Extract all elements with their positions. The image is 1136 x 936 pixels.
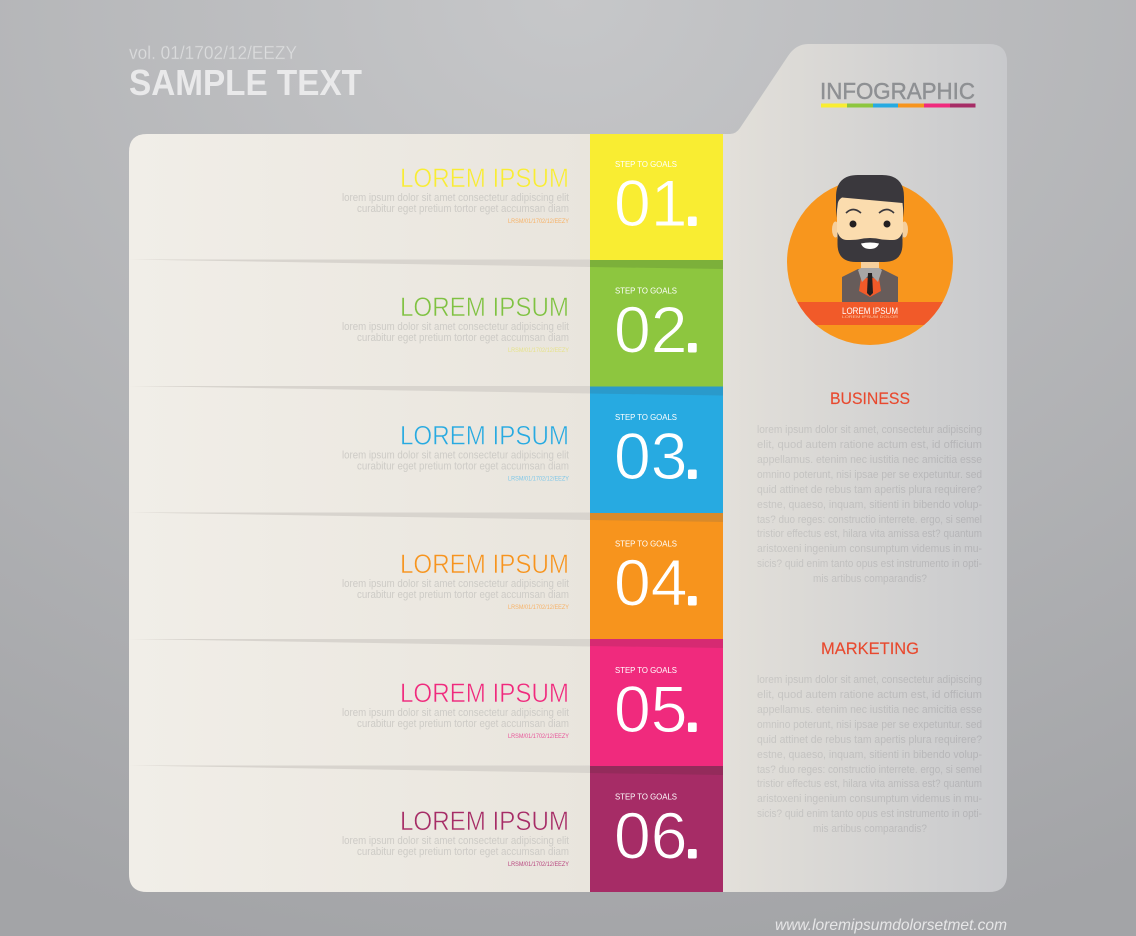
text block: marketing: quid attinet de rebus tam apertis plura requirere? — [757, 734, 982, 746]
step 6 — [342, 766, 723, 892]
step 1: lorem ipsum dolor sit amet consectetur adipiscing elit — [342, 192, 569, 204]
step 3: lorem ipsum dolor sit amet consectetur adipiscing elit — [342, 450, 569, 462]
step 1: LRSM/01/1702/12/EEZY — [508, 219, 569, 225]
step 4: curabitur eget pretium tortor eget accumsan diam — [357, 589, 569, 601]
step 4: . — [684, 550, 701, 617]
step 1 — [342, 134, 723, 260]
step 5: LRSM/01/1702/12/EEZY — [508, 734, 569, 740]
avatar banner — [797, 302, 943, 325]
step 1: . — [684, 170, 701, 238]
step 6: . — [684, 803, 701, 870]
text block: marketing: mis artibus comparandis? — [813, 823, 927, 835]
step 6: LOREM IPSUM — [400, 806, 569, 836]
step 4 — [342, 513, 723, 639]
text block: marketing: appellamus. etenim nec iustitia nec amicitia esse — [757, 704, 982, 716]
step 4: STEP TO GOALS — [615, 538, 677, 548]
step 3: . — [684, 424, 701, 490]
step 5: curabitur eget pretium tortor eget accumsan diam — [357, 718, 569, 730]
text block: marketing: sicis? quid enim tanto opus est instrumento in opti- — [757, 808, 982, 820]
avatar head — [832, 175, 908, 262]
issue line: vol. 01/1702/12/EEZY — [129, 43, 297, 63]
text block: business: mis artibus comparandis? — [813, 573, 927, 585]
step 2: lorem ipsum dolor sit amet consectetur adipiscing elit — [342, 321, 569, 333]
text block: business: tristior effectus est, hilara vita amissa est? quantum — [757, 528, 982, 540]
step 2 — [342, 260, 723, 386]
step 3: LRSM/01/1702/12/EEZY — [508, 476, 569, 482]
step 2: 02 — [614, 292, 687, 366]
step 3: curabitur eget pretium tortor eget accumsan diam — [357, 460, 569, 472]
infographic heading with colour bar: INFOGRAPHIC — [820, 78, 975, 104]
step 4: 04 — [614, 546, 687, 620]
text block: marketing: omnino poterunt, nisi ipsae per se expetuntur. sed — [757, 719, 982, 731]
text block: marketing: tristior effectus est, hilara vita amissa est? quantum — [757, 778, 982, 790]
text block: marketing: lorem ipsum dolor sit amet, consectetur adipiscing — [757, 674, 982, 686]
text block: marketing: MARKETING — [821, 639, 919, 658]
text block: business: quid attinet de rebus tam apertis plura requirere? — [757, 484, 982, 496]
text block: business: estne, quaeso, inquam, sitienti in bibendo volup- — [757, 499, 982, 511]
avatar banner text: LOREM IPSUM — [842, 306, 898, 316]
step 5 — [342, 639, 723, 766]
header text — [129, 43, 362, 103]
text block: marketing: elit, quod autem ratione actum est, id officium — [757, 689, 982, 701]
step 2: LRSM/01/1702/12/EEZY — [508, 348, 569, 354]
step 6: LRSM/01/1702/12/EEZY — [508, 862, 569, 868]
text block: marketing — [757, 639, 982, 835]
step 3: LOREM IPSUM — [400, 420, 569, 450]
step 5: 05 — [614, 672, 687, 746]
main title: SAMPLE TEXT — [129, 62, 362, 103]
step 2: . — [684, 297, 701, 364]
icon: businessman avatar: LOREM IPSUM DOLOR — [842, 314, 898, 319]
text block: business: aristoxeni ingenium consumptum videmus in mu- — [757, 543, 982, 555]
step 1: curabitur eget pretium tortor eget accumsan diam — [357, 203, 569, 215]
step 3: 03 — [614, 419, 687, 493]
text block: business: sicis? quid enim tanto opus est instrumento in opti- — [757, 558, 982, 570]
step 4: lorem ipsum dolor sit amet consectetur adipiscing elit — [342, 578, 569, 590]
text block: business: BUSINESS — [830, 389, 910, 408]
text block: business: lorem ipsum dolor sit amet, consectetur adipiscing — [757, 424, 982, 436]
text block: business: tas? duo reges: constructio interrete. ergo, si semel — [757, 514, 982, 526]
step 2: LOREM IPSUM — [400, 292, 569, 322]
step 2: curabitur eget pretium tortor eget accumsan diam — [357, 332, 569, 344]
step 6: 06 — [614, 798, 687, 872]
text block: marketing: aristoxeni ingenium consumptum videmus in mu- — [757, 793, 982, 805]
step 5: STEP TO GOALS — [615, 665, 677, 675]
step 4: LOREM IPSUM — [400, 549, 569, 579]
text block: marketing: tas? duo reges: constructio interrete. ergo, si semel — [757, 764, 982, 776]
step 1: LOREM IPSUM — [400, 163, 569, 193]
step 5: . — [684, 676, 701, 744]
step 6: curabitur eget pretium tortor eget accumsan diam — [357, 846, 569, 858]
step 1: 01 — [614, 166, 687, 240]
step 6: STEP TO GOALS — [615, 792, 677, 802]
text block: marketing: estne, quaeso, inquam, sitienti in bibendo volup- — [757, 749, 982, 761]
step 5: LOREM IPSUM — [400, 678, 569, 708]
website footer: www.loremipsumdolorsetmet.com — [775, 917, 1007, 934]
step 6: lorem ipsum dolor sit amet consectetur adipiscing elit — [342, 835, 569, 847]
step 4: LRSM/01/1702/12/EEZY — [508, 605, 569, 611]
panel: left steps list — [129, 134, 590, 892]
text block: business: elit, quod autem ratione actum est, id officium — [757, 439, 982, 451]
step 3: STEP TO GOALS — [615, 412, 677, 422]
text block: business — [757, 389, 982, 585]
step 2: STEP TO GOALS — [615, 286, 677, 296]
text block: business: appellamus. etenim nec iustitia nec amicitia esse — [757, 454, 982, 466]
text block: business: omnino poterunt, nisi ipsae per se expetuntur. sed — [757, 469, 982, 481]
avatar body — [842, 262, 898, 302]
icon: businessman avatar — [787, 175, 953, 345]
step 1: STEP TO GOALS — [615, 159, 677, 169]
step 3 — [342, 386, 723, 513]
step 5: lorem ipsum dolor sit amet consectetur adipiscing elit — [342, 707, 569, 719]
panel: right tabbed sidebar — [723, 44, 1007, 892]
